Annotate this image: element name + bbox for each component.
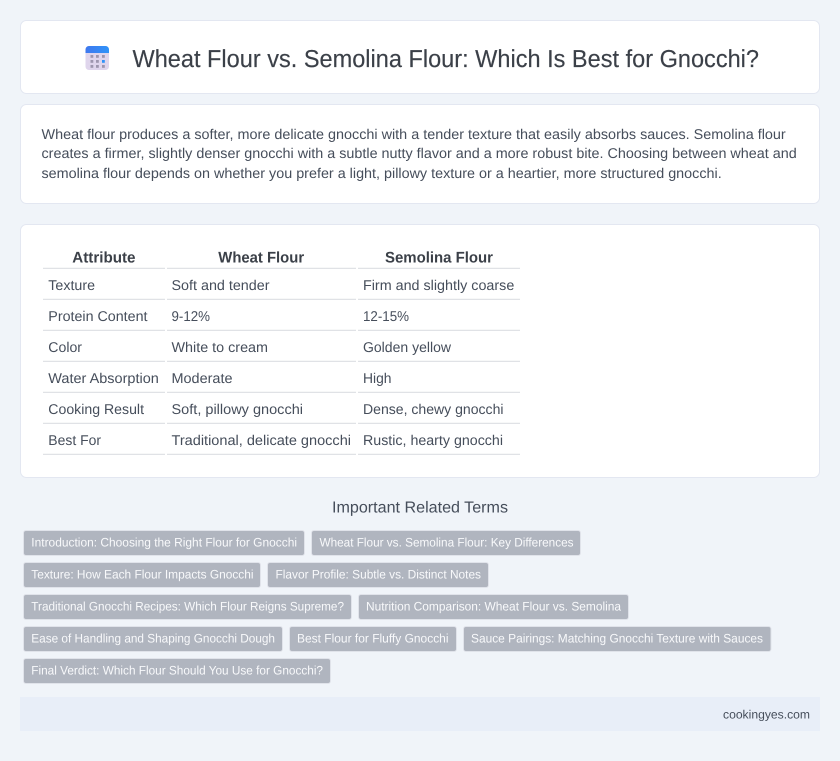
title: Wheat Flour vs. Semolina Flour: Which Is Best for Gnocchi? [132, 46, 759, 73]
tag: Sauce Pairings: Matching Gnocchi Texture with Sauces [471, 632, 763, 646]
row: best for [48, 433, 503, 449]
tag [24, 658, 330, 684]
tag [290, 626, 456, 652]
heading: important related terms: Important Related Terms [332, 500, 508, 517]
row: texture [48, 278, 514, 294]
tag: Introduction: Choosing the Right Flour for Gnocchi [31, 536, 297, 550]
tag [24, 562, 260, 588]
tag [312, 530, 580, 556]
intro text: creates a firmer, slightly denser gnocchi with a subtle nutty flavor and a more robust bite. Choosing between wheat and [42, 146, 797, 162]
tag [268, 562, 488, 588]
row: texture: Firm and slightly coarse [363, 278, 514, 294]
comparison table [43, 250, 520, 454]
row: water absorption: Moderate [172, 371, 233, 387]
row: best for: Best For [48, 433, 101, 449]
tag: Traditional Gnocchi Recipes: Which Flour Reigns Supreme? [31, 600, 344, 614]
intro text: semolina flour depends on whether you prefer a light, pillowy texture or a heartier, more structured gnocchi. [42, 166, 722, 182]
table header: Attribute [72, 250, 136, 267]
row: water absorption: Water Absorption [48, 371, 159, 387]
tag [24, 530, 304, 556]
tag: Texture: How Each Flour Impacts Gnocchi [31, 568, 253, 582]
row: color: Golden yellow [363, 340, 452, 356]
row: protein content [48, 309, 409, 325]
tag [358, 594, 628, 620]
row: best for: Traditional, delicate gnocchi [172, 433, 351, 449]
icon: calendar [86, 46, 109, 70]
tag [24, 594, 352, 620]
footer [20, 697, 820, 731]
tag: Ease of Handling and Shaping Gnocchi Dough [31, 632, 275, 646]
row: protein content: Protein Content [48, 309, 148, 325]
row: texture: Soft and tender [172, 278, 270, 294]
row: protein content: 12-15% [363, 309, 409, 325]
row: best for: Rustic, hearty gnocchi [363, 433, 503, 449]
row: cooking result [48, 402, 504, 418]
table header: Semolina Flour [385, 250, 493, 267]
intro panel [20, 104, 820, 204]
tag: Wheat Flour vs. Semolina Flour: Key Differences [320, 536, 574, 550]
table header [72, 250, 493, 267]
related terms tags [24, 530, 771, 684]
row: color: Color [48, 340, 82, 356]
row: cooking result: Soft, pillowy gnocchi [172, 402, 303, 418]
table header: Wheat Flour [218, 250, 304, 267]
header panel [20, 20, 820, 94]
tag [464, 626, 771, 652]
tag: Nutrition Comparison: Wheat Flour vs. Semolina [366, 600, 621, 614]
row: cooking result: Cooking Result [48, 402, 144, 418]
table panel [20, 224, 820, 478]
row: cooking result: Dense, chewy gnocchi [363, 402, 504, 418]
tag: Final Verdict: Which Flour Should You Use for Gnocchi? [31, 664, 323, 678]
row: color [48, 340, 452, 356]
row: water absorption [48, 371, 392, 387]
row: protein content: 9-12% [172, 309, 210, 325]
tag: Flavor Profile: Subtle vs. Distinct Notes [276, 568, 481, 582]
intro text [42, 127, 797, 182]
intro text: Wheat flour produces a softer, more delicate gnocchi with a tender texture that easily absorbs sauces. Semolina flour [42, 127, 786, 143]
tag: Best Flour for Fluffy Gnocchi [297, 632, 448, 646]
tag [24, 626, 282, 652]
row: water absorption: High [363, 371, 392, 387]
row: texture: Texture [48, 278, 95, 294]
row: color: White to cream [172, 340, 268, 356]
footer site name: cookingyes.com [723, 707, 810, 721]
